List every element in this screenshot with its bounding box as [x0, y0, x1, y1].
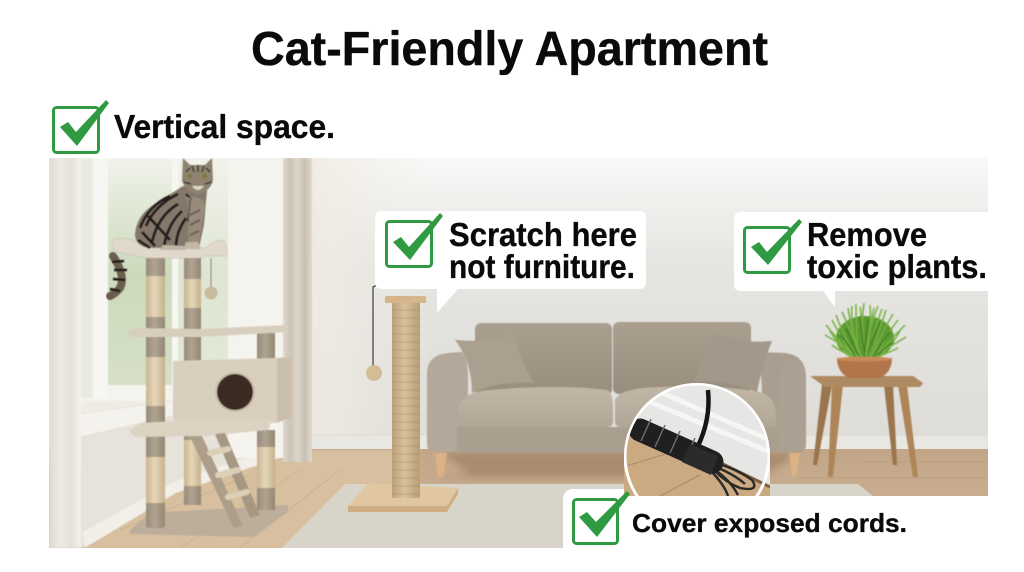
post toy — [366, 285, 382, 381]
lower platform — [129, 420, 272, 437]
right arm front — [778, 359, 806, 452]
window — [49, 158, 280, 548]
cord — [697, 390, 709, 448]
sofa — [427, 322, 806, 477]
sisal column — [392, 302, 420, 498]
inset wall — [634, 383, 770, 485]
back cushions — [475, 323, 612, 395]
icon: green check — [574, 491, 630, 544]
chest — [187, 197, 205, 247]
illustration: living room scene — [49, 125, 988, 549]
floor near window — [85, 450, 420, 548]
callout: cover exposed cords — [574, 491, 907, 544]
table legs — [813, 385, 897, 465]
label: remove toxic plants: toxic plants. — [807, 248, 987, 285]
top perch — [112, 238, 227, 258]
seat cushions — [458, 387, 613, 427]
cat — [110, 158, 213, 296]
legs — [435, 453, 447, 477]
post cap — [385, 296, 426, 303]
label: scratch here — [449, 216, 637, 285]
inset circle: cable organiser — [624, 383, 770, 496]
ladder — [190, 433, 260, 528]
pole 1 — [146, 255, 165, 528]
label: cover exposed cords: Cover exposed cords. — [632, 508, 907, 538]
body — [135, 186, 207, 248]
hanging toy — [204, 258, 218, 300]
label: remove toxic plants: Remove — [807, 216, 927, 253]
icon: green check — [54, 100, 109, 152]
pot — [837, 358, 892, 378]
left arm — [427, 352, 468, 452]
body stripes — [138, 194, 186, 248]
right sheer curtain — [228, 195, 284, 458]
scratching post — [348, 285, 458, 512]
label: scratch here: Scratch here — [449, 216, 637, 253]
cat tree — [110, 158, 292, 537]
pole 3 — [257, 333, 275, 510]
floor shadow under sofa — [430, 452, 800, 478]
table top — [810, 376, 923, 387]
icon: green check — [386, 213, 443, 266]
inset floor — [624, 420, 770, 496]
side table with plant — [810, 303, 923, 477]
callout: scratch here — [375, 211, 646, 313]
window sill — [80, 394, 226, 437]
middle platform — [127, 325, 288, 337]
left pillow — [455, 333, 534, 393]
base — [457, 427, 778, 453]
callout: vertical space — [49, 92, 345, 158]
label: vertical space: Vertical space. — [114, 108, 335, 145]
cord bundle — [712, 463, 754, 496]
inner right arm — [760, 352, 806, 452]
callout: cover exposed cords panel — [563, 489, 988, 549]
base — [130, 505, 288, 537]
back wall — [322, 160, 988, 435]
post base — [348, 483, 458, 506]
label: remove toxic plants — [807, 216, 987, 285]
spiral wrap — [640, 430, 712, 462]
title: Cat-Friendly Apartment — [251, 23, 768, 76]
callout: remove toxic plants — [734, 212, 988, 307]
pole 2 — [184, 257, 201, 505]
wooden floor — [49, 449, 988, 549]
tail — [110, 256, 122, 296]
right pillow — [693, 332, 772, 392]
plant — [825, 303, 906, 378]
baseboard — [300, 435, 988, 450]
rug — [282, 484, 873, 548]
left sheer curtain — [49, 158, 81, 548]
label: scratch here: not furniture. — [449, 248, 635, 285]
house — [173, 357, 292, 423]
pleated curtain — [283, 158, 312, 462]
icon: green check — [744, 219, 802, 272]
head — [182, 158, 213, 194]
